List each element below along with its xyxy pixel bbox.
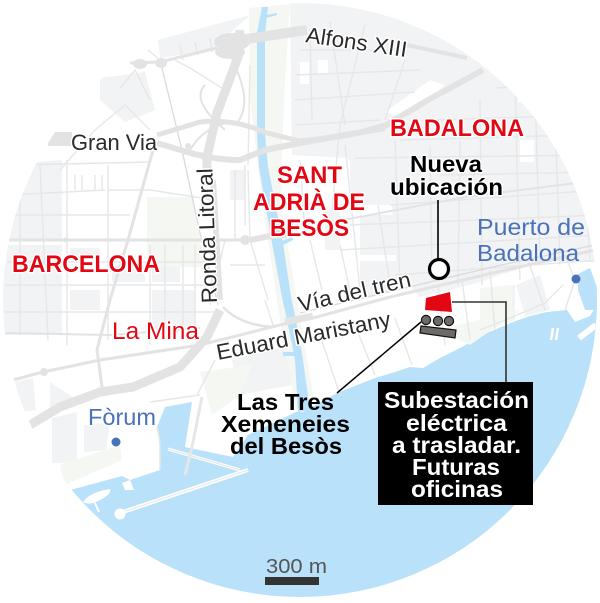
callout box: Subestación eléctrica: Subestación xyxy=(384,387,529,413)
sea xyxy=(72,306,597,597)
callout: Las Tres Xemeneies del Besòs: del Besòs xyxy=(230,433,342,459)
label: Sant Adrià de Besòs: ADRIÀ DE xyxy=(253,188,365,216)
label: Puerto de Badalona: Puerto de xyxy=(477,214,585,240)
callout: Las Tres Xemeneies del Besòs: Las Tres xyxy=(237,389,334,415)
callout box: Subestación eléctrica: Futuras xyxy=(412,454,500,480)
label: La Mina: La Mina xyxy=(112,318,200,345)
callout box: Subestación eléctrica: a trasladar. xyxy=(392,432,521,458)
city blocks xyxy=(0,0,600,463)
street grid xyxy=(5,22,600,402)
label: Sant Adrià de Besòs xyxy=(253,162,365,242)
white gaps and green areas xyxy=(296,60,548,261)
road junctions xyxy=(40,33,250,376)
main roads xyxy=(3,30,600,425)
label: Barcelona: BARCELONA xyxy=(12,251,160,278)
label: Puerto de Badalona xyxy=(477,214,585,266)
label: Ronda Litoral: Ronda Litoral xyxy=(192,168,222,304)
connector: substation to box xyxy=(452,302,506,382)
callout box: Subestación eléctrica xyxy=(378,382,533,505)
callout: Las Tres Xemeneies del Besòs xyxy=(221,322,421,459)
label: Vía del tren: Vía del tren xyxy=(296,267,413,317)
callout: Nueva ubicación: Nueva xyxy=(410,151,482,177)
scale bar: 300 m xyxy=(265,556,327,585)
label: Puerto de Badalona: Badalona xyxy=(477,240,579,266)
callout: Las Tres Xemeneies del Besòs: Xemeneies xyxy=(221,411,350,437)
port structures xyxy=(83,268,598,520)
label: Sant Adrià de Besòs: BESÒS xyxy=(270,214,349,242)
river Besòs xyxy=(257,7,310,412)
callout box: Subestación eléctrica: eléctrica xyxy=(406,410,507,436)
callout: Nueva ubicación: ubicación xyxy=(390,174,503,200)
callout box: Subestación eléctrica: oficinas xyxy=(411,476,503,502)
label: Fòrum: Fòrum xyxy=(88,404,156,430)
label: Badalona: BADALONA xyxy=(390,115,524,142)
label: Gran Via: Gran Via xyxy=(71,130,158,155)
label: Eduard Maristany: Eduard Maristany xyxy=(214,307,393,365)
label: Alfons XIII: Alfons XIII xyxy=(304,22,409,62)
icon: Fòrum dot xyxy=(112,438,120,446)
callout: Nueva ubicación xyxy=(390,151,503,278)
label: Sant Adrià de Besòs: SANT xyxy=(277,162,342,189)
icon: three chimneys xyxy=(420,315,456,338)
icon: Puerto de Badalona dot xyxy=(572,274,580,284)
railway and thin roads xyxy=(160,60,595,313)
marker: electrical substation xyxy=(425,292,452,312)
scale bar: 300 m: 300 m xyxy=(266,556,327,578)
